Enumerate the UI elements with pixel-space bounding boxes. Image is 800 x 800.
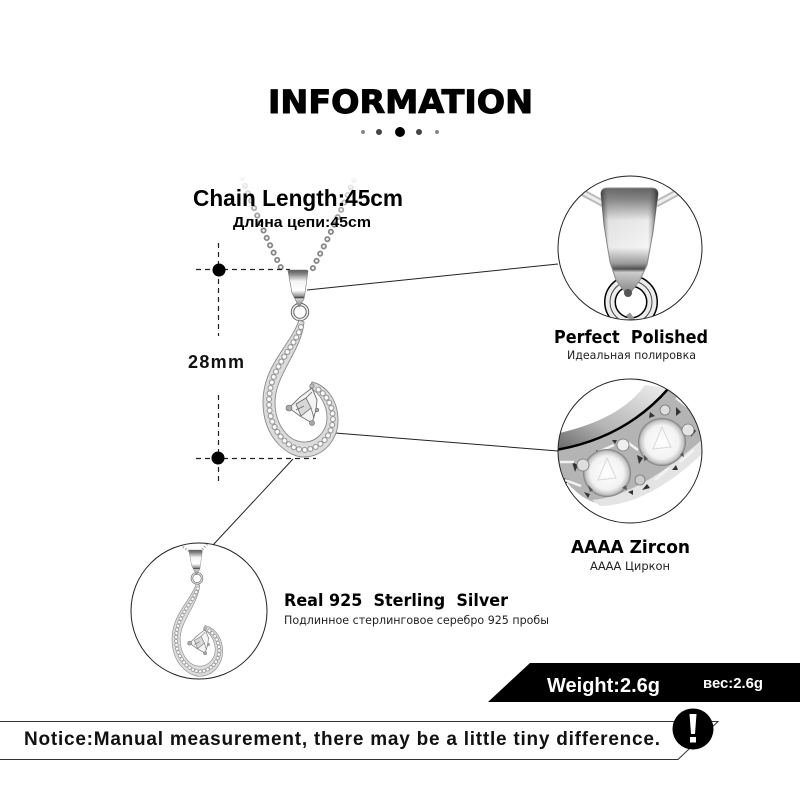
weight banner <box>488 663 800 702</box>
subheading: chain length russian: Длина цепи:45cm <box>233 214 371 231</box>
weight label: Weight:2.6g <box>547 675 660 697</box>
panel: sterling silver <box>131 543 267 679</box>
caption: perfect polished: Perfect Polished <box>554 328 708 348</box>
circle outline <box>558 176 702 320</box>
detail: zircon stones <box>555 385 710 506</box>
caption: perfect polished russian: Идеальная полировка <box>567 348 696 362</box>
dimension marker: top <box>196 243 290 336</box>
mini pendant <box>172 550 223 676</box>
weight label russian: вес:2.6g <box>703 676 763 692</box>
caption: sterling silver russian: Подлинное стерлинговое серебро 925 пробы <box>284 613 549 627</box>
title dots <box>361 127 439 137</box>
leader lines <box>213 264 558 545</box>
dimension marker: bottom <box>196 395 316 482</box>
necklace chain <box>242 178 354 272</box>
dimension label: 28mm <box>188 352 244 372</box>
panel: aaaa zircon <box>555 379 710 523</box>
circle outline <box>131 543 267 679</box>
icon: exclamation <box>672 708 714 750</box>
notice strip <box>0 708 718 760</box>
panel: perfect polished <box>558 176 702 323</box>
caption: zircon: AAAA Zircon <box>571 538 690 558</box>
detail: polished bail <box>578 188 682 323</box>
heading: chain length: Chain Length:45cm <box>193 185 403 211</box>
title: INFORMATION <box>268 83 533 121</box>
circle outline <box>558 379 702 523</box>
mini chain <box>183 544 207 551</box>
caption: sterling silver: Real 925 Sterling Silver <box>284 591 509 611</box>
pendant <box>263 270 338 457</box>
caption: zircon russian: АААА Циркон <box>590 559 670 573</box>
notice text: Notice:Manual measurement, there may be a little tiny difference. <box>24 729 660 750</box>
